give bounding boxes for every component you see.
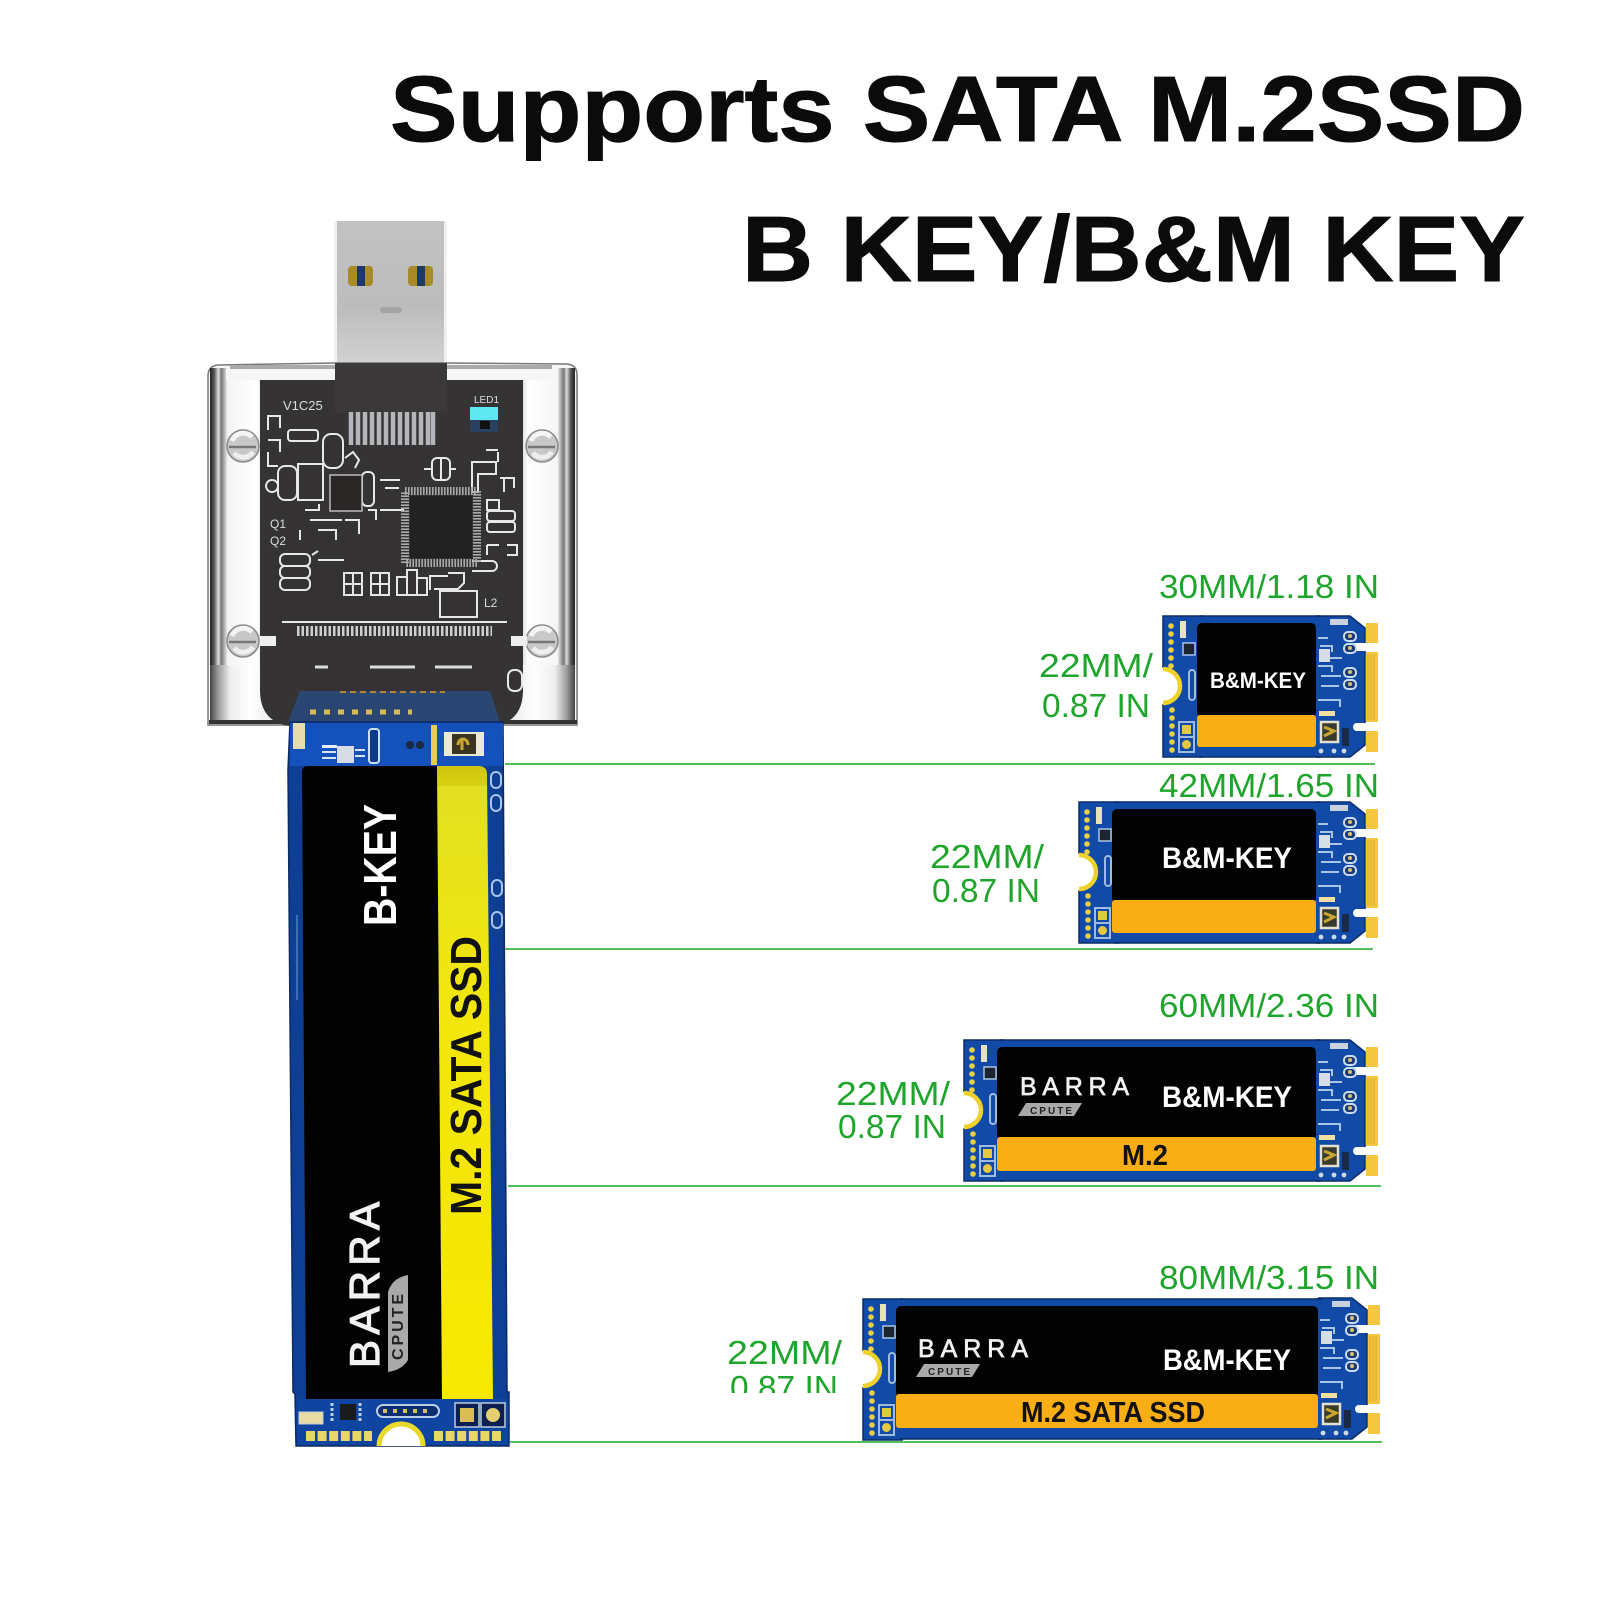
panel: 30mm card — [1039, 568, 1379, 757]
card 60mm key text: B&M-KEY — [1162, 1081, 1292, 1114]
card 60mm width label — [836, 1075, 951, 1145]
card 60mm orange label — [997, 1137, 1316, 1171]
SSD top components: Q3 — [464, 745, 466, 747]
card 30mm width label: 22MM/ — [1039, 647, 1154, 684]
panel: 42mm card — [930, 767, 1379, 943]
card 42mm key text: B&M-KEY — [1162, 842, 1292, 875]
card 42mm orange label — [1112, 900, 1316, 933]
pin strip — [297, 626, 492, 636]
traces: V1C25 — [283, 398, 323, 413]
controller chip — [405, 491, 477, 563]
card 30mm black label — [1197, 623, 1316, 717]
card 60mm length label: 60MM/2.36 IN — [1159, 987, 1379, 1024]
panel: 60mm card — [836, 987, 1379, 1181]
SSD seen through case — [288, 691, 500, 722]
card 42mm width label — [930, 838, 1045, 909]
SSD bottom end — [297, 1399, 508, 1446]
LED: LED1 — [474, 395, 499, 406]
card 60mm board — [964, 1040, 1378, 1181]
SSD black label — [302, 766, 442, 1399]
SSD brand: BARRA: BARRA — [341, 1202, 388, 1368]
card 80mm brand: CPUTE — [928, 1367, 970, 1378]
card 80mm orange label — [896, 1394, 1318, 1428]
card 80mm brand — [916, 1335, 1028, 1378]
traces: Q2 — [270, 534, 286, 548]
acrylic case — [208, 363, 577, 725]
second chip — [330, 475, 362, 511]
LED — [470, 395, 499, 432]
traces: Q1 — [270, 517, 286, 531]
card 30mm width label: 0.87 IN — [1042, 687, 1150, 724]
card 42mm length label: 42MM/1.65 IN — [1159, 767, 1379, 804]
card 30mm width label — [1039, 647, 1154, 724]
SSD brand tag: CPUTE: CPUTE — [390, 1294, 407, 1360]
card 30mm key text: B&M-KEY — [1210, 668, 1306, 693]
card 60mm orange text: M.2 — [1122, 1140, 1168, 1172]
panel: USB enclosure adapter — [208, 221, 577, 726]
traces — [266, 398, 522, 691]
card 60mm width label: 0.87 IN — [838, 1108, 946, 1145]
card 80mm board — [863, 1298, 1380, 1440]
green guide lines — [505, 764, 1382, 1442]
card 42mm width label: 22MM/ — [930, 838, 1045, 875]
title — [390, 57, 1525, 301]
card 42mm black label — [1112, 809, 1316, 903]
title: B KEY/B&M KEY — [742, 197, 1525, 301]
card 80mm orange text: M.2 SATA SSD — [1021, 1397, 1205, 1429]
card 60mm brand: CPUTE — [1030, 1106, 1072, 1117]
card 60mm brand: BARRA — [1020, 1073, 1129, 1101]
SSD brand tag: CPUTE — [388, 1275, 408, 1372]
SSD label: M.2 SATA SSD: M.2 SATA SSD — [442, 936, 491, 1215]
card 80mm brand: BARRA — [918, 1335, 1028, 1363]
card 80mm length label: 80MM/3.15 IN — [1159, 1259, 1379, 1296]
USB plug — [334, 221, 447, 364]
card 80mm width label — [720, 1334, 850, 1406]
card 60mm black label — [997, 1047, 1316, 1141]
card 42mm board — [1079, 802, 1378, 943]
card 42mm width label: 0.87 IN — [932, 872, 1040, 909]
panel: 80mm card — [720, 1259, 1380, 1440]
card 80mm key text: B&M-KEY — [1163, 1344, 1291, 1377]
title: Supports SATA M.2SSD — [390, 57, 1525, 161]
card 30mm length label: 30MM/1.18 IN — [1159, 568, 1379, 605]
silk dashes — [315, 666, 472, 668]
traces: L2 — [484, 596, 498, 610]
connector stripes — [351, 412, 433, 445]
SSD label: B-KEY: B-KEY — [354, 804, 406, 926]
screws — [227, 430, 558, 657]
card 30mm board — [1163, 616, 1378, 757]
card 80mm black label — [896, 1306, 1318, 1398]
SSD top components — [290, 723, 503, 1000]
SSD yellow label — [437, 766, 493, 1399]
card 80mm width label: 0.87 IN — [730, 1369, 838, 1406]
card 30mm orange label — [1197, 715, 1316, 747]
card 60mm width label: 22MM/ — [836, 1075, 951, 1112]
circuit board — [260, 363, 523, 726]
panel: large M.2 SATA SSD vertical — [288, 722, 509, 1446]
card 80mm width label: 22MM/ — [727, 1334, 843, 1371]
card 60mm brand — [1018, 1073, 1129, 1117]
